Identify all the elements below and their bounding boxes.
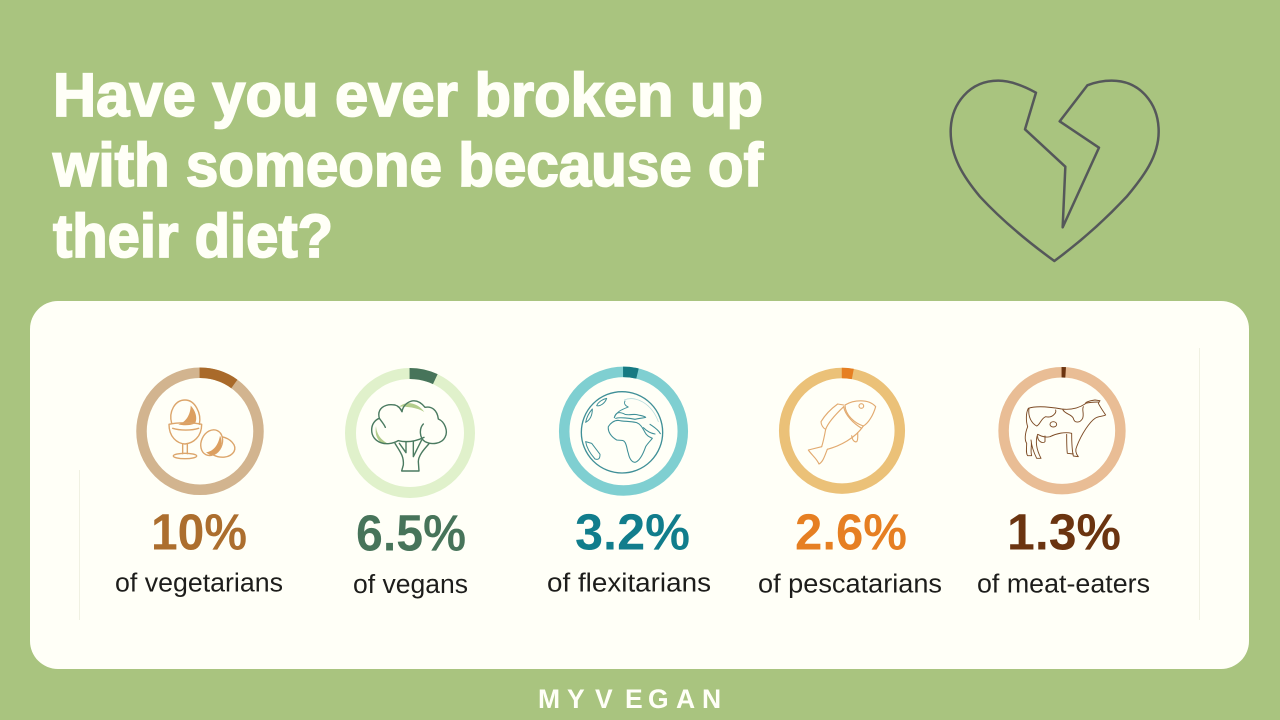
title: with someone because of bbox=[52, 131, 764, 199]
label: of pescatarians: of pescatarians bbox=[758, 570, 942, 598]
icon: globe bbox=[581, 392, 663, 473]
label: of meat-eaters: of meat-eaters bbox=[977, 570, 1150, 598]
label: of flexitarians: of flexitarians bbox=[547, 570, 711, 598]
icon: cow bbox=[1025, 400, 1106, 458]
donut: 10% bbox=[142, 373, 258, 490]
panel: statistics card bbox=[30, 301, 1249, 669]
donut: 2.6% bbox=[784, 373, 900, 489]
icon: broken heart bbox=[951, 81, 1159, 261]
value: 3.2%: 3.2% bbox=[575, 503, 690, 560]
title: Have you ever broken up bbox=[53, 61, 763, 129]
stat: meat-eaters bbox=[977, 372, 1150, 598]
donut: 3.2% bbox=[564, 372, 683, 491]
donut: 1.3% bbox=[1004, 372, 1120, 489]
logo: MYVEGAN: MYVEGAN bbox=[538, 684, 721, 714]
title: their diet? bbox=[53, 202, 333, 270]
value: 2.6%: 2.6% bbox=[795, 503, 907, 560]
icon: broccoli bbox=[372, 401, 446, 471]
value: 10%: 10% bbox=[151, 503, 247, 560]
label: of vegans: of vegans bbox=[353, 571, 468, 599]
icon: egg in cup bbox=[169, 400, 235, 459]
donut: 6.5% bbox=[350, 374, 470, 492]
value: 1.3%: 1.3% bbox=[1007, 503, 1121, 560]
stat: vegans bbox=[350, 374, 470, 599]
value: 6.5%: 6.5% bbox=[356, 505, 466, 562]
title bbox=[52, 61, 764, 270]
icon: fish bbox=[808, 401, 876, 464]
stat: flexitarians bbox=[547, 372, 711, 598]
stat: vegetarians bbox=[115, 373, 283, 598]
stat: pescatarians bbox=[758, 373, 942, 598]
label: of vegetarians: of vegetarians bbox=[115, 570, 283, 598]
